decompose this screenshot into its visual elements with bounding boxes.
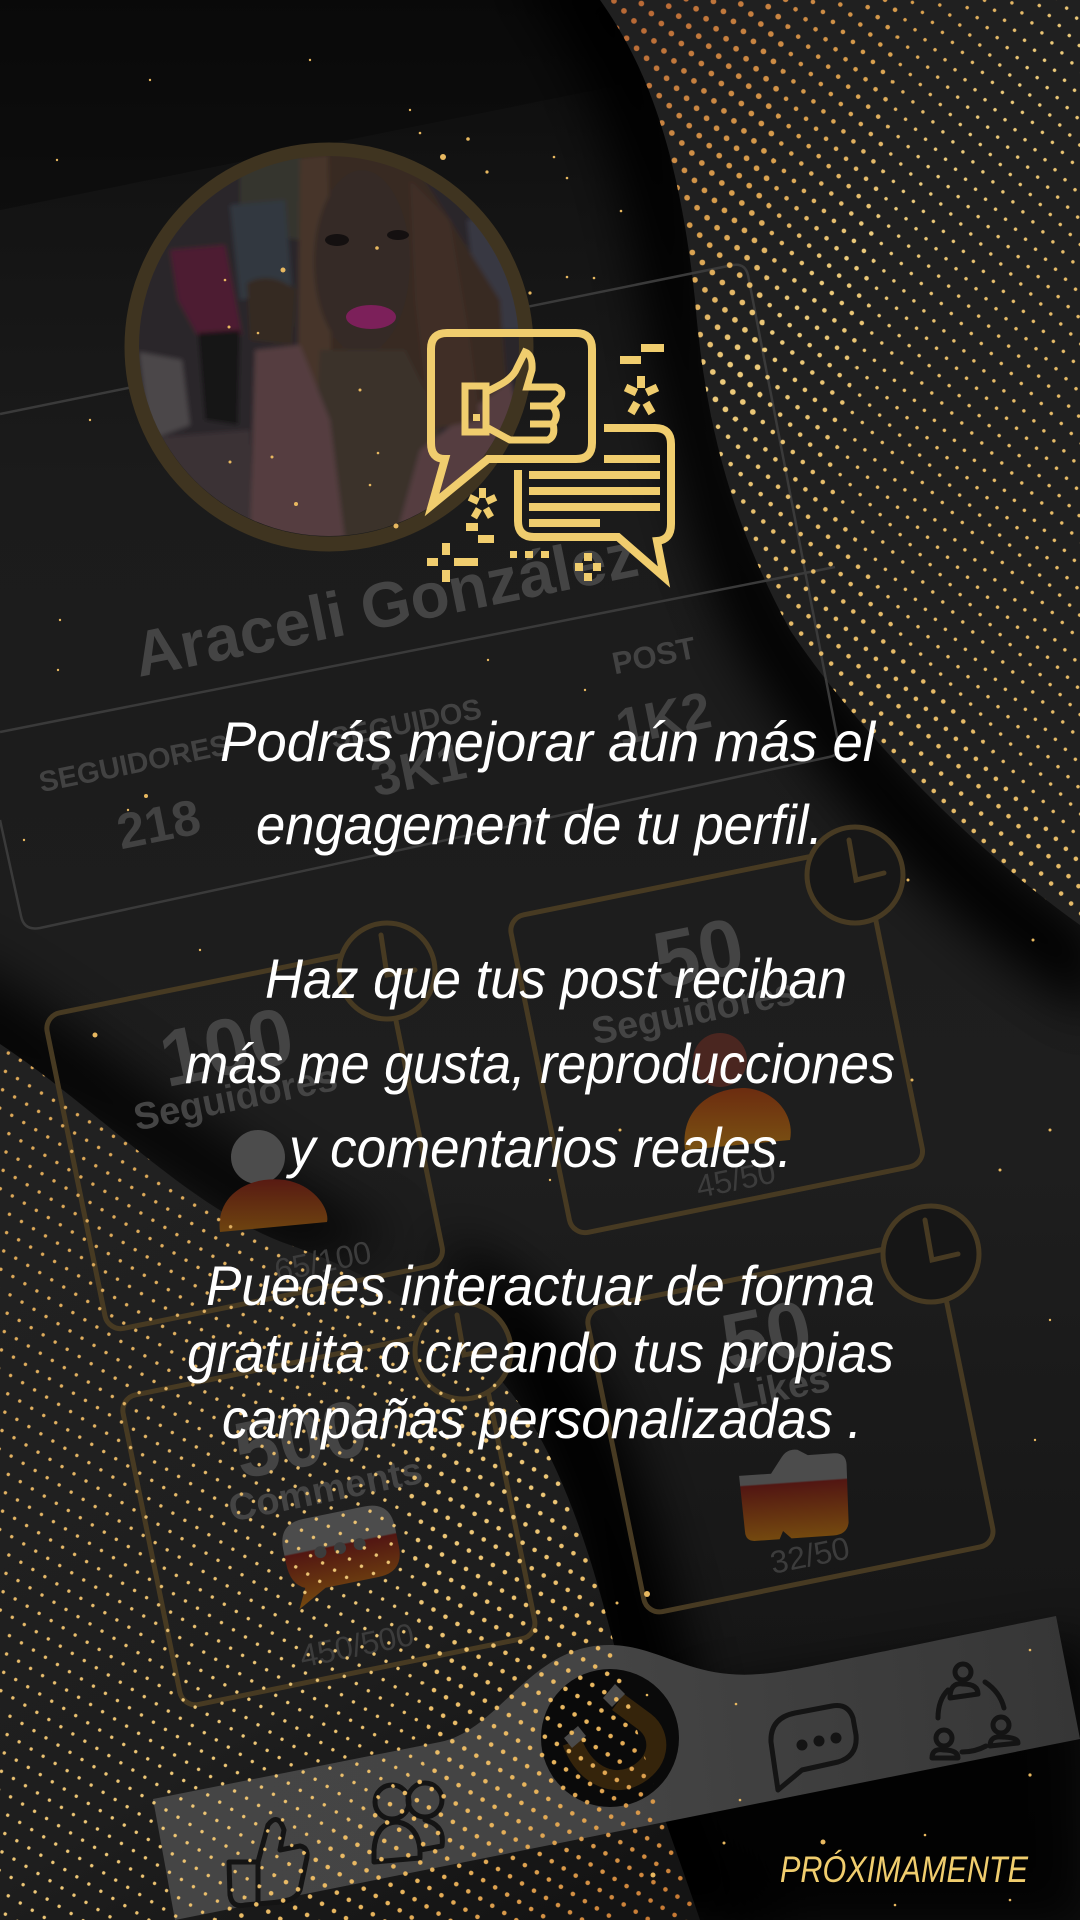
text: campaigns paragraph	[187, 1254, 894, 1450]
stat: seguidos	[328, 693, 484, 808]
card: 50 seguidores: 45/50	[693, 1154, 779, 1205]
card: 100 seguidores	[44, 923, 445, 1332]
text: campaigns paragraph: Puedes interactuar de forma	[206, 1254, 875, 1317]
black lower right corner	[700, 1640, 1080, 1920]
dark upper plane	[0, 0, 620, 210]
profile photo	[130, 149, 530, 550]
black wave shadow left	[0, 950, 400, 1260]
profile card outline	[0, 265, 839, 928]
card: 100 seguidores: Seguidores	[130, 1057, 341, 1139]
card: 500 comments	[120, 1303, 538, 1708]
nav icon: chat bubble	[771, 1706, 856, 1790]
text: posts paragraph: más me gusta, reproducciones	[185, 1032, 895, 1095]
card: 50 likes	[585, 1206, 996, 1615]
card: 500 comments: 500	[226, 1382, 375, 1496]
text: engagement paragraph: Podrás mejorar aún más el	[220, 710, 877, 773]
card: 100 seguidores: 65/100	[271, 1234, 374, 1289]
text: posts paragraph: Haz que tus post reciban	[265, 947, 847, 1010]
text: engagement paragraph: engagement de tu perfil.	[256, 793, 823, 856]
text bubble	[518, 428, 671, 577]
text: posts paragraph: y comentarios reales.	[285, 1116, 792, 1179]
text: campaigns paragraph: gratuita o creando tus propias	[187, 1321, 894, 1384]
card: 100 seguidores: 100	[152, 990, 301, 1104]
dot pattern lower left	[0, 1040, 720, 1920]
dotted wave base top right	[600, 0, 1080, 925]
text: campaigns paragraph: campañas personalizadas .	[222, 1387, 862, 1450]
stat: seguidos: SEGUIDOS	[328, 693, 484, 755]
card: 50 seguidores: Seguidores	[588, 971, 799, 1053]
stat: seguidos: 3K1	[366, 732, 471, 808]
black wave shadow lower right	[440, 1240, 790, 1920]
stat: post: POST	[609, 630, 699, 681]
nav icon: thumbs up	[229, 1820, 307, 1906]
like bubble	[431, 333, 592, 505]
nav icon: community	[932, 1664, 1018, 1758]
text: engagement paragraph	[220, 710, 877, 856]
navigation bar	[153, 1616, 1080, 1920]
nav icon: followers	[374, 1783, 442, 1862]
dot pattern top right	[600, 0, 1080, 930]
black wave shadow top right	[510, 0, 1080, 1020]
dotted wave base lower left	[0, 1044, 700, 1920]
thumb	[465, 352, 562, 440]
stat: post: 1K2	[611, 681, 716, 757]
profile name: Araceli González	[127, 518, 644, 691]
decorative sparkles	[427, 344, 664, 582]
bubble lines	[529, 455, 660, 527]
nav center button	[541, 1669, 679, 1807]
card: 50 likes: 50	[714, 1283, 819, 1388]
coming soon label: PRÓXIMAMENTE	[780, 1849, 1029, 1890]
stat: seguidores	[36, 729, 232, 860]
stat: seguidores: SEGUIDORES	[36, 729, 232, 799]
stat: post	[609, 630, 716, 757]
card: 50 seguidores: 50	[646, 901, 751, 1006]
text: posts paragraph	[185, 947, 895, 1179]
card: 50 likes: 32/50	[767, 1530, 853, 1581]
card: 50 seguidores	[508, 827, 925, 1235]
card: 500 comments: 450/500	[297, 1616, 417, 1674]
card: 500 comments: Comments	[225, 1450, 426, 1530]
icon: like and comment bubbles	[427, 333, 671, 582]
card: 50 likes: Likes	[730, 1358, 833, 1419]
stat: seguidores: 218	[112, 789, 205, 860]
